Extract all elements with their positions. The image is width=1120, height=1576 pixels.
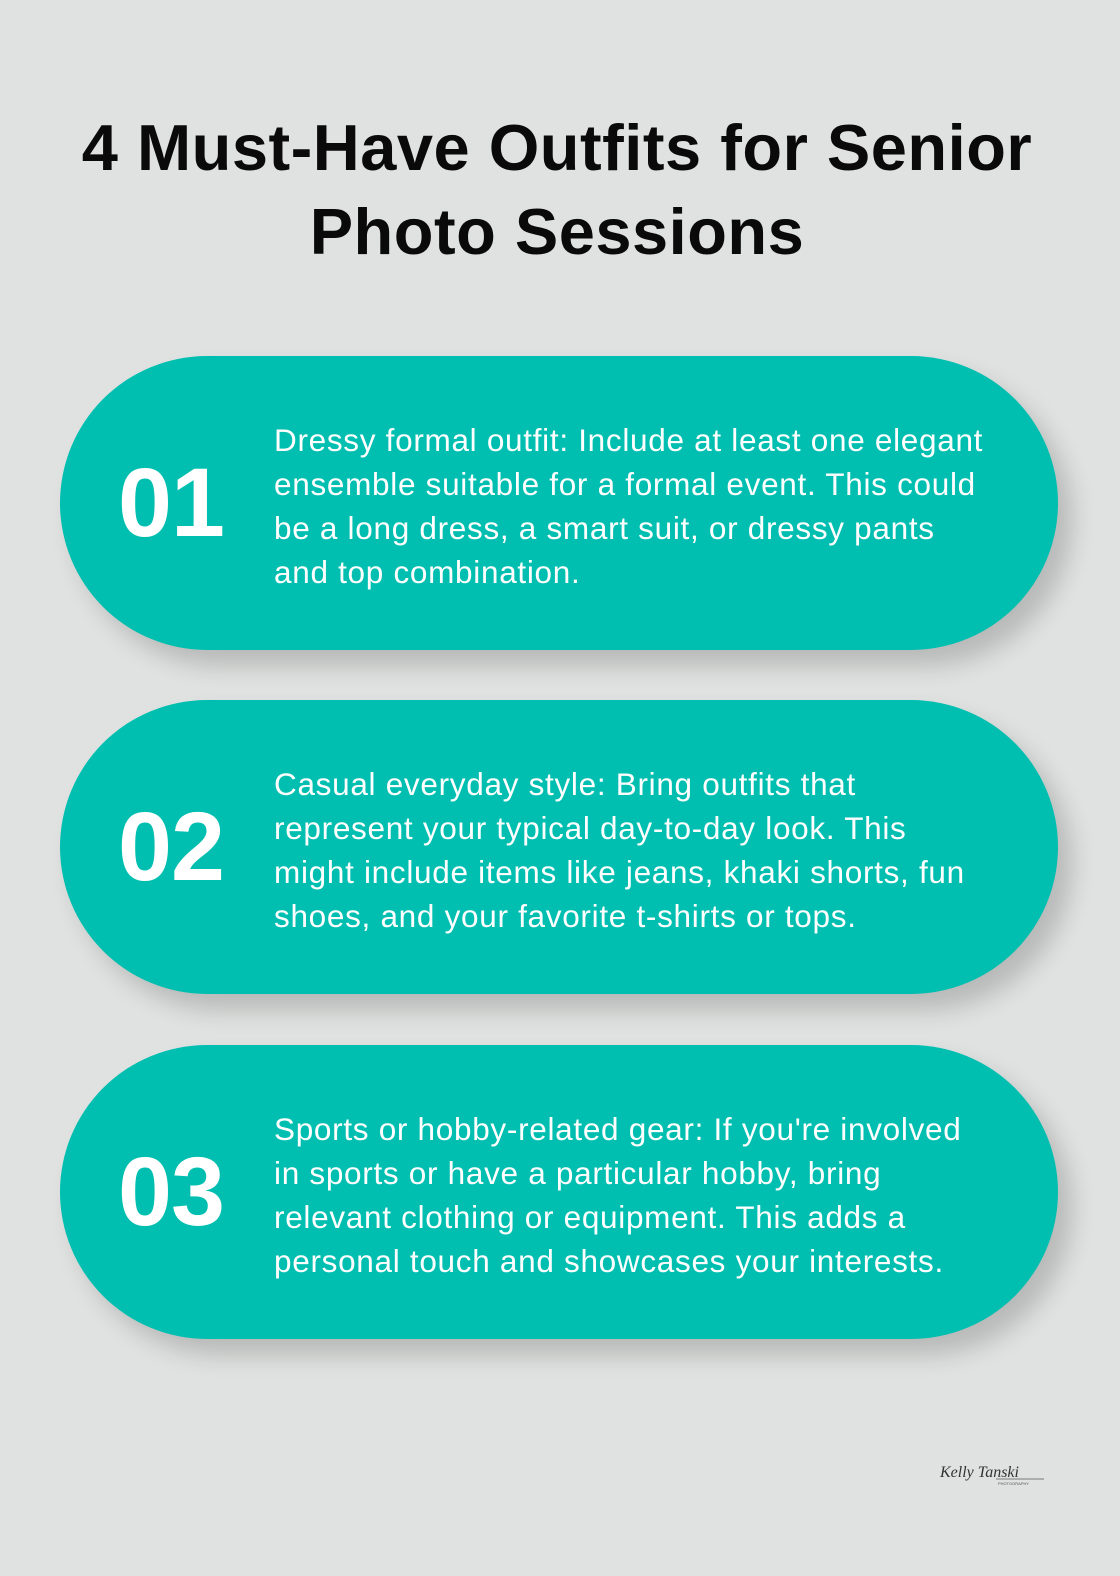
title: 4 Must-Have Outfits for Senior — [82, 111, 1032, 184]
text 01 — [274, 422, 983, 590]
text 02: Casual everyday style: Bring outfits that — [274, 766, 856, 802]
text 03: relevant clothing or equipment. This adds a — [274, 1199, 906, 1235]
text 03: in sports or have a particular hobby, bring — [274, 1155, 881, 1191]
panel: item 03 — [60, 1045, 1058, 1339]
title — [82, 111, 1032, 268]
text 02 — [274, 766, 965, 934]
number 02: 02 — [118, 792, 224, 901]
number 03: 03 — [118, 1137, 224, 1246]
text 01: and top combination. — [274, 554, 580, 590]
text 03: Sports or hobby-related gear: If you're involved — [274, 1111, 961, 1147]
text 02: might include items like jeans, khaki shorts, fun — [274, 854, 965, 890]
text 03 — [274, 1111, 961, 1279]
text 01: ensemble suitable for a formal event. This could — [274, 466, 976, 502]
text 01: be a long dress, a smart suit, or dressy pants — [274, 510, 935, 546]
text 02: represent your typical day-to-day look. This — [274, 810, 906, 846]
title: Photo Sessions — [310, 195, 804, 268]
panel: item 01 — [60, 356, 1058, 650]
text 02: shoes, and your favorite t-shirts or tops. — [274, 898, 857, 934]
logo signature — [939, 1464, 1044, 1486]
text 01: Dressy formal outfit: Include at least one elegant — [274, 422, 983, 458]
text 03: personal touch and showcases your interests. — [274, 1243, 944, 1279]
panel: item 02 — [60, 700, 1058, 994]
number 01: 01 — [118, 448, 224, 557]
logo signature: Kelly Tanski — [939, 1464, 1019, 1481]
logo signature: PHOTOGRAPHY — [998, 1481, 1029, 1486]
